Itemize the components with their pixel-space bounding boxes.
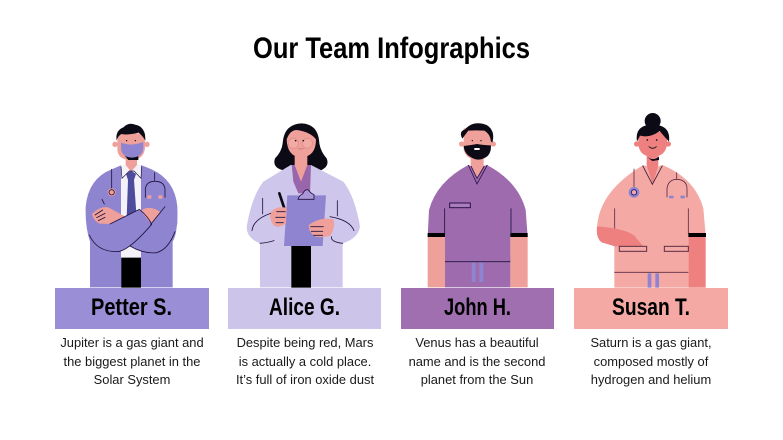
figure: Alice xyxy=(247,123,360,288)
description: John xyxy=(409,335,545,387)
figure: Petter xyxy=(86,124,177,288)
description: Alice: is actually a cold place. xyxy=(239,354,371,369)
name bar: Alice G. xyxy=(228,288,381,329)
name bar: Petter S. xyxy=(55,288,209,329)
description: Petter: Jupiter is a gas giant and xyxy=(60,335,204,350)
description: Petter: the biggest planet in the xyxy=(64,354,200,369)
description: Susan: Saturn is a gas giant, xyxy=(590,335,712,350)
title: Our Team Infographics xyxy=(253,32,530,65)
name bar: Susan T. xyxy=(574,288,728,329)
description: Petter xyxy=(60,335,204,387)
description: Susan: composed mostly of xyxy=(594,354,709,369)
name bar: Petter S.: Petter S. xyxy=(91,294,172,321)
figure: Susan xyxy=(597,113,706,288)
description: Susan xyxy=(590,335,712,387)
description: Alice: It’s full of iron oxide dust xyxy=(236,372,374,387)
description: Susan: hydrogen and helium xyxy=(591,372,711,387)
description: John: planet from the Sun xyxy=(421,372,533,387)
name bar: John H. xyxy=(401,288,554,329)
name bar: Susan T.: Susan T. xyxy=(612,294,690,321)
name bar: John H.: John H. xyxy=(444,294,511,321)
description: Alice: Despite being red, Mars xyxy=(237,335,373,350)
description: Alice xyxy=(236,335,374,387)
figure: John xyxy=(428,123,528,287)
name bar: Alice G.: Alice G. xyxy=(269,294,340,321)
description: Petter: Solar System xyxy=(94,372,170,387)
description: John: Venus has a beautiful xyxy=(415,335,539,350)
description: John: name and is the second xyxy=(409,354,545,369)
